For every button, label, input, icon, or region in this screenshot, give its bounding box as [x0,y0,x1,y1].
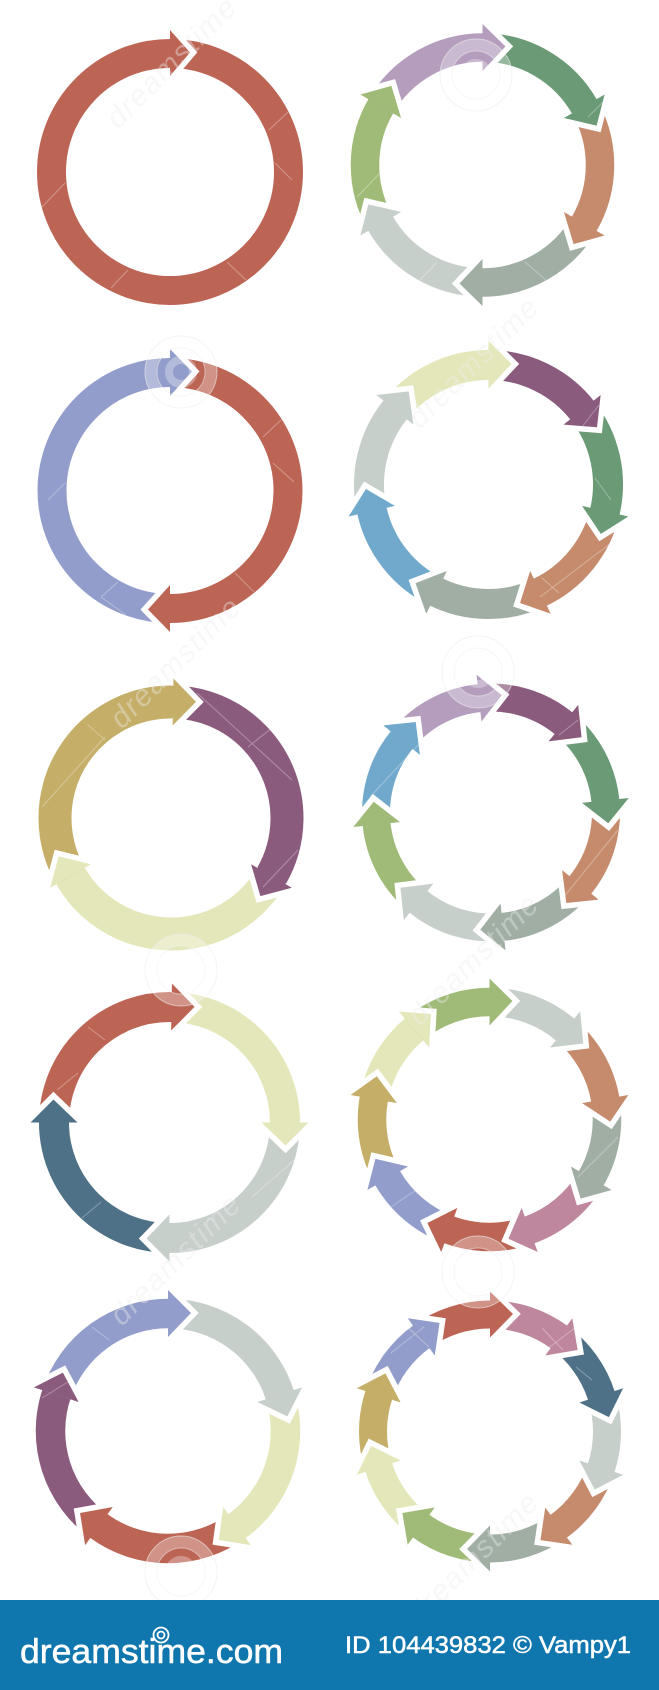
arrow: orange [324,954,655,1285]
arrow: pale yellow [52,1005,309,1240]
arrowhead: blue over light purple tail [383,707,434,755]
arrow: blue [329,325,648,644]
arrow: mustard [329,959,650,1280]
arrow: pale yellow [13,660,329,976]
ring: two arrows [52,349,288,632]
watermark: diagonal text: dreamstime [402,291,545,435]
arrow: purple [53,700,292,936]
ring: six arrows [322,4,643,326]
arrow: light grey [54,1007,285,1262]
arrow: grey green [322,4,643,326]
arrow: pale yellow [321,317,656,652]
icon: logo spiral [154,1628,168,1642]
arrow: orange [345,341,632,628]
arrow: light grey [343,1284,637,1579]
arrow: pink [329,959,650,1280]
arrow: light grey [372,1002,607,1237]
arrow: pale yellow [327,1268,653,1595]
watermark: diagonal text: dreamstime [402,1486,545,1630]
watermark: spirals [145,39,514,1608]
arrow: grey green [329,325,648,644]
arrow: light purple [329,651,653,974]
arrow: red full circle [52,30,288,290]
arrow: grey green [329,651,653,974]
image id and credit: ID 104439832 © Vampy1 [345,1632,631,1659]
watermark: diagonal text [100,0,545,1630]
watermark: diagonal text: dreamstime [104,1188,247,1332]
footer logo text: dreamstime.com [20,1633,283,1671]
arrow: periwinkle [339,969,640,1270]
arrowhead: light grey over yellow tail [376,377,428,425]
arrow: grey green [353,983,626,1256]
arrow: green [329,651,653,974]
ring: five arrows [4,1267,332,1595]
arrow: olive [322,4,643,326]
arrow: red [54,984,285,1238]
arrowhead: purple over periwinkle tail [34,1366,86,1402]
arrow: periwinkle [52,349,288,608]
ring: eight arrows [329,651,653,974]
arrow: orange [365,686,617,939]
arrow: pale yellow [353,983,626,1256]
arrowhead: olive over purple tail [360,75,413,118]
ring: nine arrows [324,954,655,1285]
arrow: blue [365,686,617,939]
ring: one arrow [52,30,288,290]
arrow: light grey [50,1314,309,1548]
arrow: green [365,48,616,282]
arrow: pink [373,1314,607,1548]
arrow: light purple [322,4,643,326]
arrow: purple [4,1267,332,1595]
arrow: purple [369,365,615,604]
footer band [0,1600,659,1690]
ring: three arrows [13,660,329,976]
ring: seven arrows [321,317,656,652]
arrowhead: red over periwinkle tail [148,585,170,632]
arrow: orange [322,4,643,326]
arrow: navy [327,1268,653,1595]
arrow: red [52,372,288,632]
arrow: pale yellow [20,1283,316,1579]
arrow: red [339,969,640,1270]
arrow: light grey [365,686,617,939]
arrow: purple [365,686,617,939]
arrow: light grey [345,341,632,628]
arrowhead: navy over red tail [30,1100,78,1122]
arrow: olive [324,954,655,1285]
arrowhead: periwinkle over red tail [408,1305,453,1355]
arrow: olive [373,1314,607,1548]
arrow: mustard [343,1284,637,1579]
arrowhead: yellow over mustard tail [39,844,91,888]
arrow: olive [329,651,653,974]
watermark: diagonal text: dreamstime [402,888,545,1032]
arrow: red [327,1268,653,1595]
arrow: light grey [349,48,600,282]
arrow: periwinkle [343,1284,637,1579]
arrow: green [321,317,656,652]
arrow: orange [343,1284,637,1579]
ring: four arrows [30,984,308,1262]
watermark: diagonal text: dreamstime [104,591,247,735]
arrowhead: yellow over olive tail [399,997,447,1047]
arrow: grey green [327,1268,653,1595]
arrow: periwinkle [20,1283,316,1579]
arrow: red [4,1267,332,1595]
arrow: navy [30,1007,285,1238]
arrow: mustard [13,660,329,976]
ring: ten arrows [327,1268,653,1595]
